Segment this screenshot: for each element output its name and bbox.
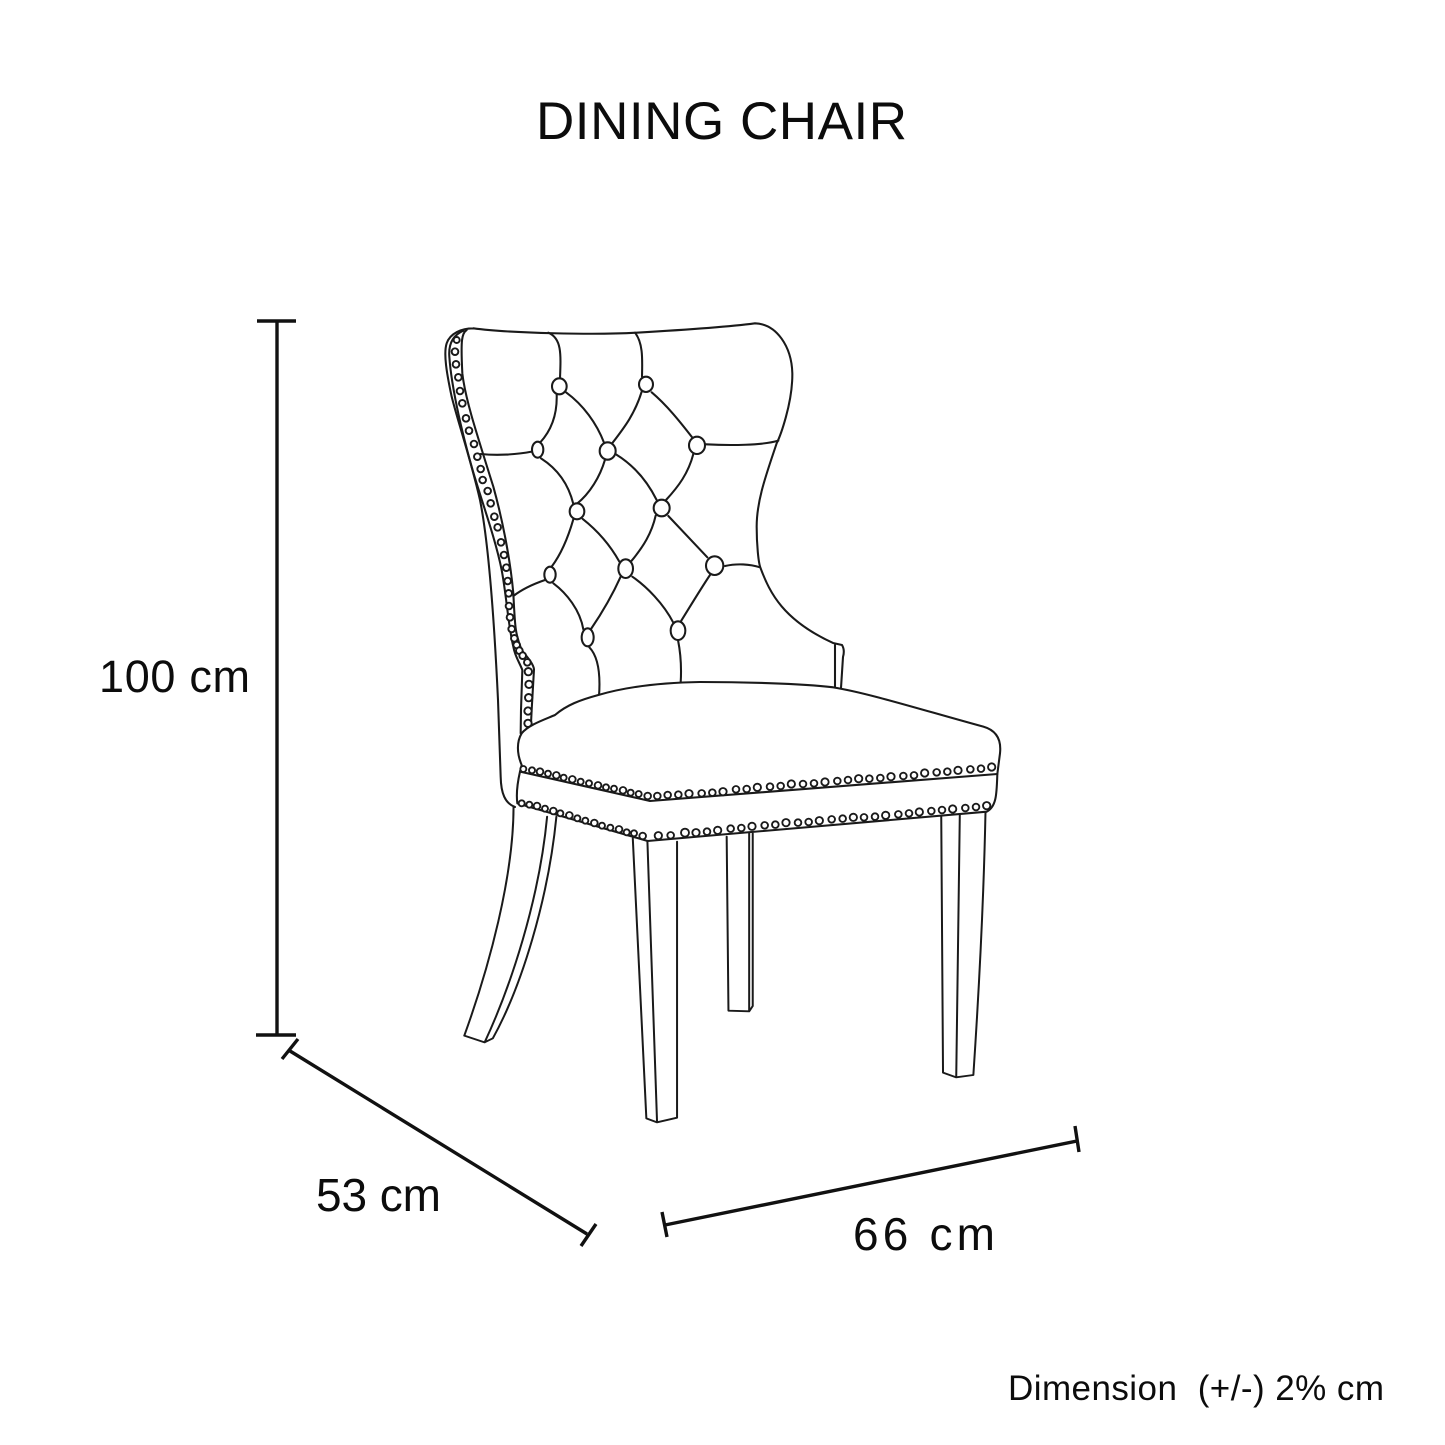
seat piping line [520,772,997,801]
chair back [445,323,844,807]
tufting seams [481,333,778,696]
depth label: 53 cm [316,1169,441,1221]
tolerance note: Dimension (+/-) 2% cm [1008,1369,1384,1408]
front left leg [633,838,677,1122]
chair illustration [445,323,1000,1122]
height label: 100 cm [99,651,250,702]
nail rail edges [449,330,534,733]
back outline [445,323,844,807]
chair legs [464,807,986,1122]
height dimension line [256,321,296,1035]
depth dimension line [282,1039,596,1246]
seat cushion and apron [517,682,1000,841]
seat lower nailheads [519,800,990,839]
chair seat [517,682,1000,841]
tufting buttons [532,377,723,646]
rear left curved leg [464,807,556,1042]
title: DINING CHAIR [536,92,907,151]
back nailheads [452,337,533,727]
width label: 66 cm [853,1208,995,1260]
width dimension line [662,1126,1079,1237]
rear middle leg [727,833,753,1011]
seat top nailheads [520,763,995,799]
front right leg [941,812,986,1077]
